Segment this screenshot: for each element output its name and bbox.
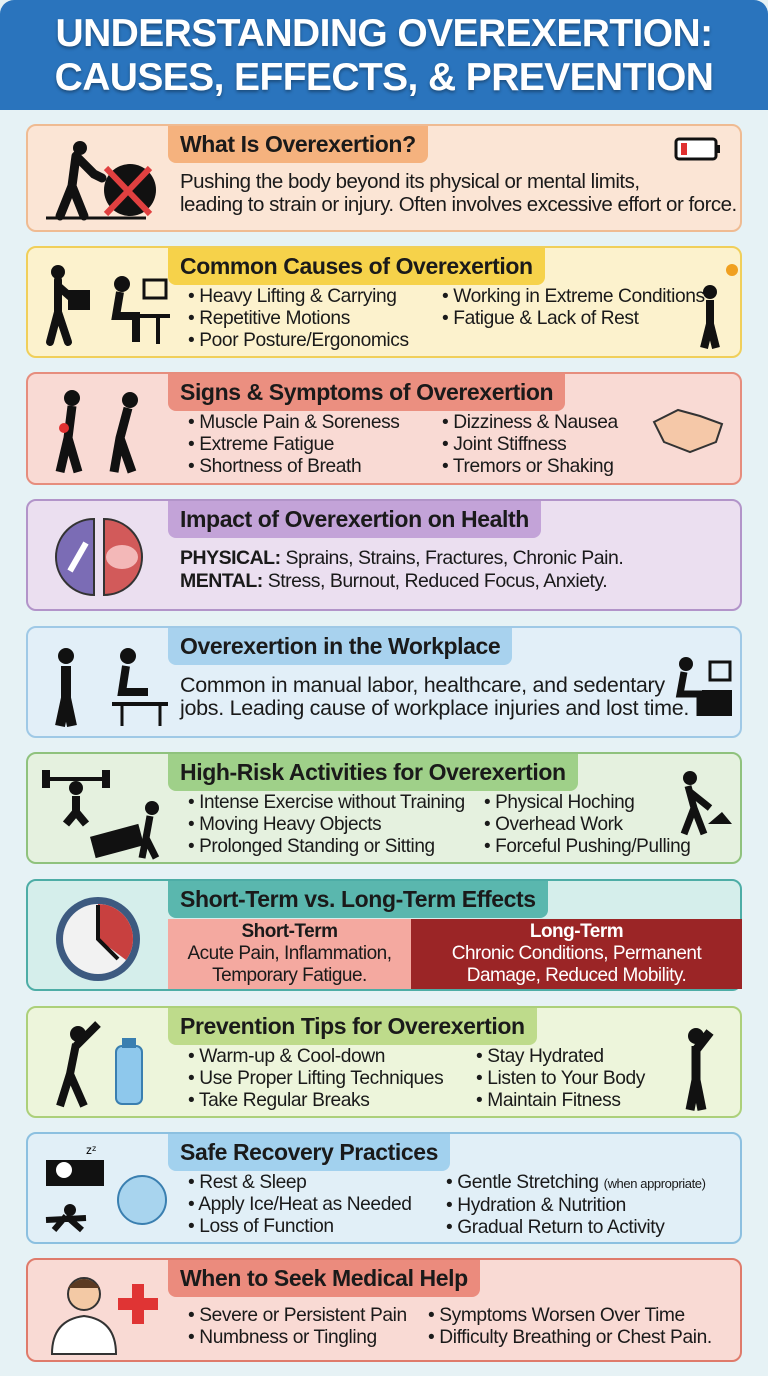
icon: weightlifter and mover [42, 770, 160, 860]
list left: • Repetitive Motions [188, 308, 350, 329]
panel: workplace [26, 626, 742, 738]
icon: sleeping, ice pack, stretching [46, 1143, 167, 1232]
list right [484, 792, 690, 857]
heading: Signs & Symptoms of Overexertion [180, 379, 553, 405]
list right [442, 286, 705, 329]
description: Pushing the body beyond its physical or mental limits, [180, 170, 640, 193]
short-term box [168, 919, 411, 989]
list left: • Apply Ice/Heat as Needed [188, 1194, 412, 1215]
list left [188, 1046, 443, 1111]
description: MENTAL: Stress, Burnout, Reduced Focus, Anxiety. [180, 570, 607, 592]
list right: • Symptoms Worsen Over Time [428, 1305, 685, 1326]
title [0, 0, 768, 110]
heading: When to Seek Medical Help [180, 1265, 468, 1291]
list left: • Heavy Lifting & Carrying [188, 286, 397, 307]
icon: drinking figure [686, 1028, 714, 1111]
list left: • Numbness or Tingling [188, 1327, 377, 1348]
description [180, 170, 737, 216]
heading [168, 881, 548, 918]
heading: High-Risk Activities for Overexertion [180, 759, 566, 785]
icon: figures in pain [56, 390, 138, 474]
panel: recovery [26, 1132, 742, 1244]
icon: desk worker [676, 657, 732, 716]
description: PHYSICAL: Sprains, Strains, Fractures, Chronic Pain. [180, 547, 623, 569]
list right: • Gradual Return to Activity [446, 1217, 664, 1238]
list left: • Rest & Sleep [188, 1172, 306, 1193]
panel: impact [26, 499, 742, 611]
list left [188, 412, 400, 477]
list right [476, 1046, 646, 1111]
list right: • Overhead Work [484, 814, 623, 835]
heading [168, 374, 565, 411]
list right: • Working in Extreme Conditions [442, 286, 705, 307]
icon: battery [674, 138, 720, 160]
panel: short vs long-term [26, 879, 742, 991]
list right [446, 1172, 706, 1238]
panel: seek medical help [26, 1258, 742, 1362]
list left [188, 286, 409, 351]
heading: Common Causes of Overexertion [180, 253, 533, 279]
heading [168, 1008, 537, 1045]
panel: causes [26, 246, 742, 358]
list right: • Gentle Stretching (when appropriate) [446, 1172, 706, 1193]
long-term box [411, 919, 742, 989]
list right: • Stay Hydrated [476, 1046, 604, 1067]
list left [188, 1172, 412, 1237]
heading [168, 126, 428, 163]
list left: • Take Regular Breaks [188, 1090, 369, 1111]
list right: • Listen to Your Body [476, 1068, 645, 1089]
list left: • Poor Posture/Ergonomics [188, 330, 409, 351]
list right [442, 412, 618, 477]
description [180, 547, 623, 592]
list right: • Forceful Pushing/Pulling [484, 836, 690, 857]
long-term box: Damage, Reduced Mobility. [467, 965, 686, 986]
list left: • Muscle Pain & Soreness [188, 412, 399, 433]
heading [168, 248, 545, 285]
list right: • Maintain Fitness [476, 1090, 621, 1111]
long-term box: Chronic Conditions, Permanent [452, 943, 701, 964]
heading [168, 628, 512, 665]
list left: • Intense Exercise without Training [188, 792, 465, 813]
list right: • Fatigue & Lack of Rest [442, 308, 639, 329]
list right [428, 1305, 712, 1348]
description [179, 673, 689, 720]
list left: • Prolonged Standing or Sitting [188, 836, 435, 857]
list left [188, 1305, 407, 1348]
icon: shaking hands [652, 408, 724, 454]
short-term box: Short-Term [242, 921, 337, 942]
panel: high-risk activities [26, 752, 742, 864]
short-term box: Temporary Fatigue. [212, 965, 367, 986]
panel: what is overexertion [26, 124, 742, 232]
icon: clock [56, 897, 140, 981]
heading [168, 1134, 450, 1171]
long-term box: Long-Term [530, 921, 623, 942]
list left: • Use Proper Lifting Techniques [188, 1068, 443, 1089]
list right: • Tremors or Shaking [442, 456, 613, 477]
list right: • Hydration & Nutrition [446, 1195, 626, 1216]
list left: • Extreme Fatigue [188, 434, 334, 455]
list right: • Physical Hoching [484, 792, 634, 813]
icon: bone and brain [55, 518, 143, 596]
icon: lifting and desk worker [46, 265, 170, 346]
list left: • Shortness of Breath [188, 456, 361, 477]
list left: • Loss of Function [188, 1216, 334, 1237]
icon: digging worker [680, 771, 732, 836]
heading: What Is Overexertion? [180, 131, 416, 157]
short-term box: Acute Pain, Inflammation, [188, 943, 392, 964]
list left: • Moving Heavy Objects [188, 814, 381, 835]
icon: pushing figure [46, 141, 156, 220]
title: UNDERSTANDING OVEREXERTION: [56, 12, 712, 55]
list right: • Dizziness & Nausea [442, 412, 618, 433]
description: leading to strain or injury. Often involves excessive effort or force. [180, 193, 737, 216]
heading: Impact of Overexertion on Health [180, 506, 529, 532]
title: CAUSES, EFFECTS, & PREVENTION [55, 56, 713, 99]
icon: stretching and bottle [56, 1021, 143, 1108]
list left [188, 792, 465, 857]
icon: sleeping, ice pack, stretching: zᶻ [86, 1143, 96, 1157]
description: jobs. Leading cause of workplace injuries and lost time. [180, 696, 689, 720]
description: Common in manual labor, healthcare, and sedentary [180, 673, 665, 697]
heading: Safe Recovery Practices [180, 1139, 438, 1165]
heading [168, 1260, 480, 1297]
icon: heat worker [700, 264, 738, 349]
panel: prevention [26, 1006, 742, 1118]
list right: • Difficulty Breathing or Chest Pain. [428, 1327, 712, 1348]
list left: • Warm-up & Cool-down [188, 1046, 385, 1067]
list right: • Joint Stiffness [442, 434, 566, 455]
list left: • Severe or Persistent Pain [188, 1305, 407, 1326]
icon: doctor and cross [51, 1277, 158, 1355]
icon: worker and nurse [55, 648, 168, 727]
heading: Prevention Tips for Overexertion [180, 1013, 525, 1039]
heading: Short-Term vs. Long-Term Effects [180, 886, 536, 912]
heading [168, 501, 541, 538]
panel: signs [26, 372, 742, 485]
heading [168, 754, 578, 791]
heading: Overexertion in the Workplace [180, 633, 500, 659]
